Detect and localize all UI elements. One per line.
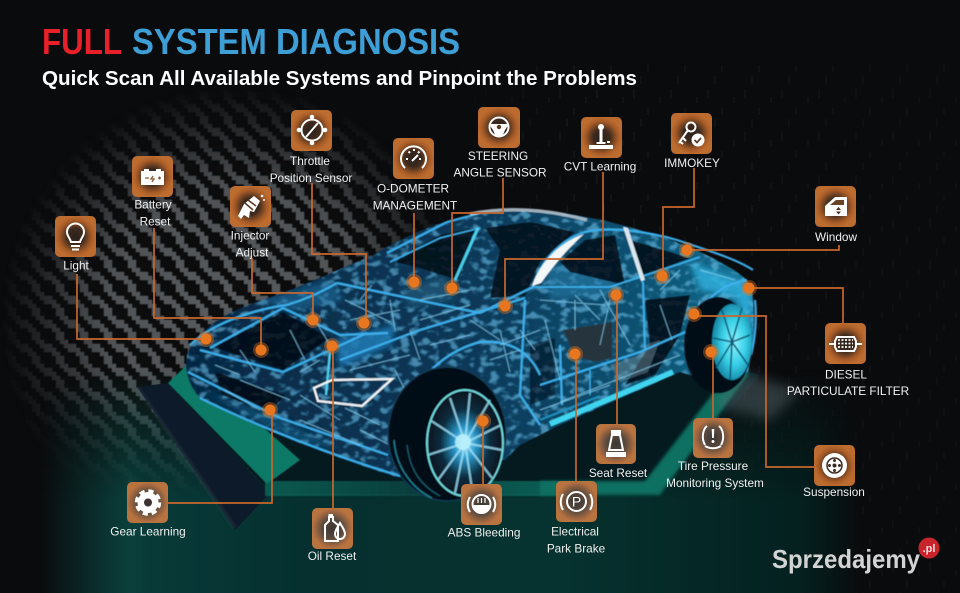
icon: park brake	[556, 481, 597, 522]
label: Window	[815, 230, 857, 244]
marker dot	[198, 331, 214, 347]
label: Light	[63, 258, 90, 272]
label: IMMOKEY	[664, 156, 720, 170]
watermark: Sprzedajemy	[772, 544, 920, 574]
marker dot	[567, 346, 583, 362]
label: MANAGEMENT	[373, 198, 457, 212]
label: Electrical	[551, 524, 599, 538]
callout: Gear Learning	[110, 402, 278, 538]
label: Monitoring System	[666, 476, 764, 490]
icon: gauge	[393, 138, 434, 179]
callout: ABS Bleeding	[448, 413, 520, 540]
marker dot	[324, 338, 340, 354]
marker dot	[305, 312, 321, 328]
leader line	[332, 346, 334, 508]
leader line	[154, 228, 261, 350]
sill glow	[550, 372, 673, 424]
leader line	[749, 288, 843, 323]
marker dot	[741, 280, 757, 296]
label	[453, 149, 547, 180]
icon: park brake: P	[572, 494, 581, 510]
callout: Steering Angle Sensor	[444, 107, 547, 296]
callout: Oil Reset	[308, 338, 357, 563]
platform under car	[137, 360, 800, 530]
front wheel	[388, 367, 506, 501]
leader line	[712, 352, 714, 418]
leader line	[312, 183, 366, 323]
leader line	[452, 178, 503, 288]
car wireframe	[186, 210, 756, 501]
marker dot	[406, 274, 422, 290]
label: ABS Bleeding	[448, 526, 520, 540]
marker dot	[686, 306, 702, 322]
label: CVT Learning	[564, 160, 636, 174]
label: DIESEL	[825, 368, 867, 382]
label: STEERING	[468, 149, 528, 163]
leader line	[252, 258, 313, 320]
icon: battery	[132, 156, 173, 197]
headlight	[314, 379, 392, 406]
label: Gear Learning	[110, 524, 186, 538]
icon: wheel	[814, 445, 855, 486]
marker dot	[679, 242, 695, 258]
battery block	[563, 322, 612, 362]
leader line	[663, 168, 694, 276]
watermark: .pl	[923, 543, 935, 555]
label: O-DOMETER	[377, 182, 449, 196]
callout: Injector Adjust	[230, 186, 321, 328]
label: Adjust	[236, 246, 269, 260]
marker dot	[608, 287, 624, 303]
label	[231, 228, 269, 260]
callout: O-Dometer Management	[373, 138, 457, 290]
icon: throttle	[291, 110, 332, 151]
leader line	[413, 213, 415, 282]
leader line	[694, 316, 814, 467]
label	[373, 182, 457, 212]
label	[547, 524, 606, 556]
label: Position Sensor	[270, 171, 352, 185]
title: SYSTEM DIAGNOSIS	[132, 21, 460, 62]
marker dot	[703, 344, 719, 360]
icon: oil bottle	[312, 508, 353, 549]
label: PARTICULATE FILTER	[787, 384, 909, 398]
leader line	[168, 410, 272, 503]
dark cavities	[213, 222, 690, 412]
callout: CVT Learning	[497, 117, 636, 314]
car body	[186, 210, 754, 478]
title: FULL	[42, 21, 122, 62]
marker dot	[262, 402, 278, 418]
callout: Battery Reset	[132, 156, 269, 358]
callout: Electrical Park Brake	[547, 346, 606, 556]
leader line	[482, 421, 484, 484]
callout: Window	[679, 186, 857, 258]
label: Battery	[134, 198, 172, 212]
label: Seat Reset	[589, 466, 648, 480]
label: Reset	[140, 214, 171, 228]
leader line	[77, 274, 206, 339]
callout: Tire Pressure Monitoring System	[666, 344, 764, 490]
leader line	[575, 354, 577, 481]
icon: key with check	[671, 113, 712, 154]
label: Park Brake	[547, 542, 606, 556]
label	[134, 198, 172, 228]
bright struts	[188, 213, 756, 476]
callout: Light	[55, 216, 214, 347]
icon: seat	[596, 424, 636, 464]
icon: joystick	[581, 117, 622, 158]
label	[787, 368, 909, 398]
label: Oil Reset	[308, 549, 357, 563]
callout: IMMOKEY	[654, 113, 720, 284]
glow patches	[200, 262, 752, 450]
icon: steering wheel	[478, 107, 520, 148]
label: Tire Pressure	[678, 459, 749, 473]
icon: tire pressure	[693, 418, 733, 458]
icon: gear	[127, 482, 168, 523]
label	[666, 459, 764, 490]
rear wheel	[684, 297, 752, 393]
marker dot	[444, 280, 460, 296]
label: Injector	[231, 228, 269, 242]
callout: Throttle Position Sensor	[270, 110, 372, 331]
callout: Suspension	[686, 306, 865, 499]
label: ANGLE SENSOR	[453, 166, 547, 180]
icon: light bulb	[55, 216, 96, 257]
roof highlight	[470, 210, 587, 220]
marker dot	[654, 268, 670, 284]
label: Throttle	[290, 154, 330, 168]
marker dot	[356, 315, 372, 331]
marker dot	[497, 298, 513, 314]
icon: car window	[815, 186, 856, 227]
label	[270, 154, 352, 185]
leader line	[505, 172, 603, 306]
callout: Diesel Particulate Filter	[741, 280, 909, 398]
icon: ABS brake	[461, 484, 502, 525]
car texture	[186, 210, 754, 478]
callout: Seat Reset	[589, 287, 648, 480]
icon: injector	[230, 186, 271, 227]
subtitle: Quick Scan All Available Systems and Pinpoint the Problems	[42, 68, 637, 90]
leader line	[687, 245, 839, 250]
marker dot	[475, 413, 491, 429]
label: Suspension	[803, 485, 865, 499]
marker dot	[253, 342, 269, 358]
window highlight	[532, 234, 584, 286]
icon: particulate filter	[825, 323, 866, 364]
leader line	[616, 295, 618, 424]
